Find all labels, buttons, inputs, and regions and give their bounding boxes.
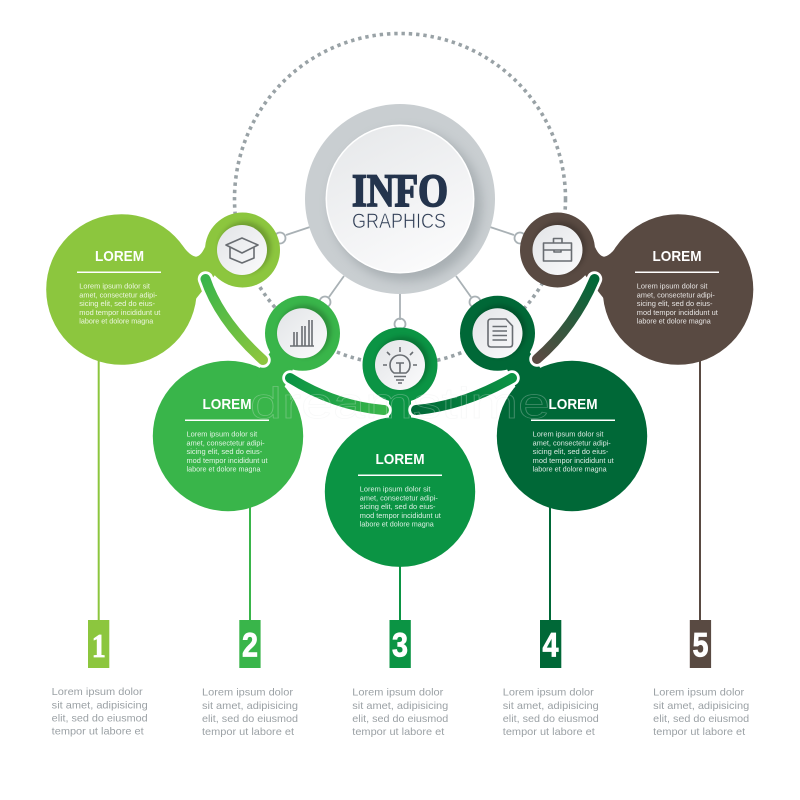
caption 5: [653, 686, 749, 738]
central hub: [305, 104, 495, 294]
icon disc: document: [472, 305, 526, 358]
stem 2: [249, 505, 251, 622]
panel 3 text: mod tempor incididunt ut: [360, 513, 441, 520]
caption 5: tempor ut labore et: [653, 726, 745, 738]
panel 2 text: Lorem ipsum dolor sit: [186, 432, 257, 438]
icon disc: light bulb: [375, 336, 429, 390]
panel 5: brown bubble: [520, 212, 753, 365]
panel 3 text: [358, 451, 442, 529]
number tag 2: [239, 620, 261, 668]
number tag 2: 2: [242, 626, 258, 664]
connector lines from hub to nodes: [274, 227, 526, 330]
number tag 4: [540, 620, 561, 668]
panel 4 text: [531, 396, 615, 474]
stem 4: [549, 505, 551, 622]
panel 2: green bubble: [153, 296, 340, 511]
icon disc: bar chart: [277, 305, 331, 358]
caption 2: Lorem ipsum dolor: [202, 686, 294, 698]
caption 5: sit amet, adipisicing: [653, 700, 749, 712]
panel 3: mid green bubble: [325, 328, 475, 567]
panel 1 text: Lorem ipsum dolor sit: [79, 284, 150, 290]
caption 1: tempor ut labore et: [52, 726, 144, 738]
panel 4 text: labore et dolore magna: [533, 467, 607, 474]
panel 3 text: LOREM: [376, 451, 424, 468]
panel 5 text: Lorem ipsum dolor sit: [637, 284, 708, 290]
arm: dark green to brown: [537, 279, 594, 359]
caption 1: sit amet, adipisicing: [52, 699, 148, 711]
panel 5 text: amet, consectetur adipi-: [637, 292, 715, 299]
panel 5 text: sicing elit, sed do eius-: [637, 301, 713, 308]
panel 3 text: amet, consectetur adipi-: [360, 495, 438, 502]
arm: lime to green: [206, 279, 263, 360]
number tag 1: [88, 620, 109, 668]
panel 2 text: sicing elit, sed do eius-: [186, 449, 263, 456]
caption 1: [52, 686, 148, 738]
caption 1: Lorem ipsum dolor: [52, 686, 143, 698]
watermark: dreamstime: [250, 379, 550, 428]
caption 4: Lorem ipsum dolor: [503, 686, 594, 698]
panel 1 text: [77, 248, 161, 326]
panel 1 text: amet, consectetur adipi-: [79, 292, 158, 299]
stem 1: [98, 360, 100, 622]
caption 4: sit amet, adipisicing: [503, 700, 599, 712]
caption 3: Lorem ipsum dolor: [352, 686, 444, 698]
panel 5 text: [635, 248, 719, 326]
arm: green to mid green: [290, 378, 384, 410]
panel 2 text: labore et dolore magna: [186, 467, 261, 474]
panel 4 text: amet, consectetur adipi-: [533, 440, 611, 447]
number tag 3: 3: [392, 626, 408, 664]
panel 5 text: mod tempor incididunt ut: [637, 310, 718, 317]
panel 4 text: mod tempor incididunt ut: [533, 458, 614, 465]
panel 2 text: amet, consectetur adipi-: [186, 440, 265, 447]
panel 1: lime bubble: [46, 212, 280, 365]
panel 5 text: labore et dolore magna: [637, 319, 711, 326]
stem 5: [699, 360, 701, 622]
panel 1 text: labore et dolore magna: [79, 319, 153, 326]
caption 4: [503, 686, 599, 738]
caption 3: [352, 686, 448, 738]
panel 3 text: Lorem ipsum dolor sit: [360, 486, 431, 494]
icon disc: graduation cap: [217, 222, 271, 275]
panel 1 text: mod tempor incididunt ut: [79, 310, 160, 317]
caption 5: elit, sed do eiusmod: [653, 713, 749, 725]
panel 1 text: LOREM: [95, 248, 144, 265]
panel 2 text: mod tempor incididunt ut: [186, 458, 268, 465]
caption 2: tempor ut labore et: [202, 726, 294, 738]
number tag 3: [390, 620, 411, 668]
caption 3: elit, sed do eiusmod: [352, 713, 448, 725]
subtitle: GRAPHICS: GRAPHICS: [352, 210, 446, 233]
caption 1: elit, sed do eiusmod: [52, 712, 148, 724]
caption 5: Lorem ipsum dolor: [653, 686, 745, 698]
panel 5 text: LOREM: [652, 248, 702, 265]
caption 3: sit amet, adipisicing: [352, 700, 448, 712]
panel 4 text: LOREM: [548, 396, 598, 413]
title: INFO: INFO: [352, 165, 448, 217]
caption 2: [202, 686, 298, 738]
caption 2: sit amet, adipisicing: [202, 700, 298, 712]
panel 4 text: sicing elit, sed do eius-: [533, 449, 609, 456]
panel 1 text: sicing elit, sed do eius-: [79, 301, 156, 308]
stem 3: [399, 560, 401, 622]
number tag 4: 4: [542, 626, 559, 664]
arm: mid green to dark green: [416, 378, 512, 410]
dotted orbit: [234, 34, 566, 364]
caption 2: elit, sed do eiusmod: [202, 713, 298, 725]
white arm outlines: [206, 279, 594, 410]
caption 4: tempor ut labore et: [503, 726, 595, 738]
panel 4 text: Lorem ipsum dolor sit: [533, 432, 603, 438]
icon disc: briefcase: [532, 222, 586, 275]
number tag 5: [690, 620, 711, 668]
panel 3 text: labore et dolore magna: [360, 522, 434, 529]
panel 3 text: sicing elit, sed do eius-: [360, 504, 436, 511]
caption 4: elit, sed do eiusmod: [503, 713, 599, 725]
number tag 5: 5: [692, 626, 708, 664]
panel 2 text: [185, 396, 269, 474]
panel 4: dark green bubble: [460, 296, 647, 511]
panel 2 text: LOREM: [202, 396, 252, 413]
number tag 1: 1: [92, 628, 106, 665]
caption 3: tempor ut labore et: [352, 726, 444, 738]
